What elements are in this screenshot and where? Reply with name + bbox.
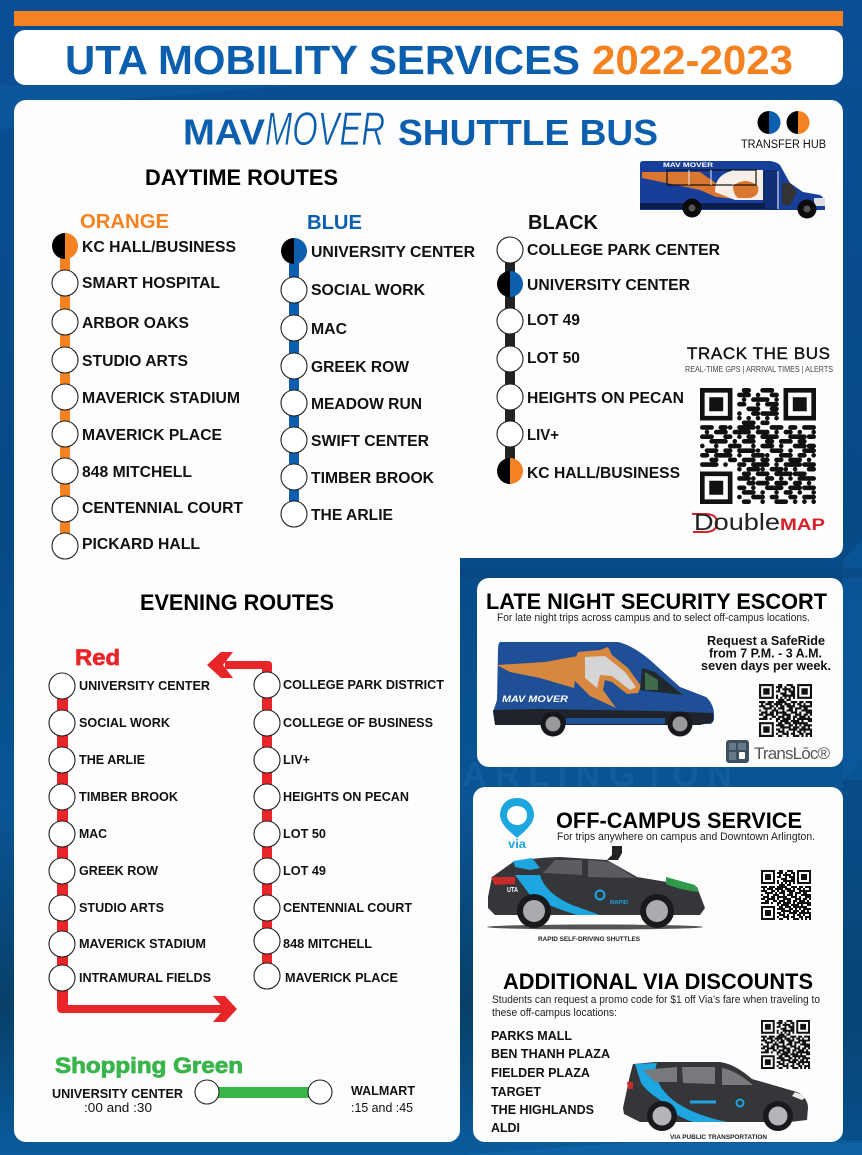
heading: additional Via discounts: ADDITIONAL VIA DISCOUNTS — [503, 969, 813, 994]
route: black: COLLEGE PARK CENTER — [527, 242, 720, 259]
route: shopping green: WALMART — [351, 1083, 415, 1098]
route: red left column — [49, 645, 237, 1022]
logo: DoubleMap: Double — [694, 509, 780, 535]
route: blue: UNIVERSITY CENTER — [311, 244, 475, 261]
heading: MavMover Shuttle Bus: MOVER — [265, 102, 385, 155]
list: discount locations: BEN THANH PLAZA — [491, 1046, 611, 1061]
route name: black: BLACK — [528, 212, 599, 234]
route: red left column: GREEK ROW — [79, 863, 159, 878]
heading: daytime routes: DAYTIME ROUTES — [145, 165, 338, 190]
route: black: KC HALL/BUSINESS — [527, 465, 680, 482]
description: late night: For late night trips across campus and to select off-campus locations. — [497, 612, 810, 624]
description: discounts: these off-campus locations: — [492, 1007, 617, 1019]
route name: blue: BLUE — [307, 212, 362, 234]
route: black: LIV+ — [527, 427, 559, 444]
heading: track the bus: TRACK THE BUS — [687, 344, 830, 363]
route: blue: SWIFT CENTER — [311, 433, 429, 450]
route: orange: STUDIO ARTS — [82, 353, 188, 370]
heading: MavMover Shuttle Bus: SHUTTLE BUS — [398, 112, 658, 153]
panel: via services — [473, 787, 843, 1142]
route: red right column: MAVERICK PLACE — [285, 970, 398, 985]
route name: red: Red — [75, 645, 120, 670]
route: black: LOT 49 — [527, 312, 580, 329]
route: red right column: HEIGHTS ON PECAN — [283, 789, 409, 804]
logo: Via — [500, 798, 534, 851]
logo: DoubleMap — [692, 509, 825, 535]
title text: UTA Mobility Services: UTA MOBILITY SERVICES — [65, 37, 580, 83]
caption: rapid self-driving shuttles: RAPID SELF-DRIVING SHUTTLES — [538, 937, 640, 943]
caption: tracking features: REAL-TIME GPS | ARRIVAL TIMES | ALERTS — [685, 365, 833, 374]
icon: Via minivan — [623, 1062, 808, 1131]
list: discount locations: FIELDER PLAZA — [491, 1065, 591, 1080]
legend: transfer hub — [741, 111, 826, 151]
heading: MavMover Shuttle Bus: MAV — [183, 112, 265, 152]
route: black: HEIGHTS ON PECAN — [527, 390, 684, 407]
route: red left column: STUDIO ARTS — [79, 900, 164, 915]
icon: self-driving car: UTA — [507, 887, 518, 894]
list: discount locations — [491, 1028, 611, 1135]
route: red right column: CENTENNIAL COURT — [283, 900, 412, 915]
icon: self-driving car: RAPID — [610, 900, 628, 906]
route: red left column: SOCIAL WORK — [79, 715, 171, 730]
route: red left column: MAVERICK STADIUM — [79, 936, 206, 951]
QR code: Via off-campus — [761, 870, 811, 920]
route: orange: KC HALL/BUSINESS — [82, 239, 236, 256]
heading: late night security escort: LATE NIGHT SECURITY ESCORT — [486, 589, 827, 614]
title banner — [14, 30, 843, 85]
route: orange — [52, 211, 243, 559]
route: orange: MAVERICK STADIUM — [82, 390, 240, 407]
heading: off-campus service: OFF-CAMPUS SERVICE — [556, 808, 802, 833]
title text: year: 2022-2023 — [592, 37, 793, 83]
caption: via public transportation: VIA PUBLIC TRANSPORTATION — [670, 1135, 767, 1141]
route: orange: MAVERICK PLACE — [82, 427, 222, 444]
description: discounts: Students can request a promo code for $1 off Via’s fare when traveling to — [492, 994, 820, 1006]
QR code: TransLoc — [759, 684, 812, 737]
QR code: Via discounts — [761, 1020, 810, 1069]
route: shopping green: UNIVERSITY CENTER — [52, 1086, 184, 1101]
icon: shuttle bus: MAV MOVER — [663, 163, 714, 169]
heading: MavMover Shuttle Bus — [183, 102, 658, 155]
route: red right column: 848 MITCHELL — [283, 936, 372, 951]
route: red right column: COLLEGE PARK DISTRICT — [283, 677, 444, 692]
arrow: to left column — [207, 652, 272, 690]
route: black: LOT 50 — [527, 350, 580, 367]
logo: DoubleMap: MAP — [780, 516, 825, 534]
heading: evening routes: EVENING ROUTES — [140, 590, 334, 615]
route: black: UNIVERSITY CENTER — [527, 277, 690, 294]
route: blue: GREEK ROW — [311, 359, 410, 376]
logo: TransLoc: TransLōc® — [754, 744, 830, 763]
callout: request a SafeRide: Request a SafeRide — [707, 633, 825, 648]
route: red left column: THE ARLIE — [79, 752, 145, 767]
list: discount locations: ALDI — [491, 1120, 520, 1135]
icon: Mav Mover van — [493, 642, 714, 736]
arrow: to right column — [57, 985, 237, 1022]
route: orange: PICKARD HALL — [82, 536, 200, 553]
callout: request a SafeRide: from 7 P.M. - 3 A.M. — [709, 646, 822, 660]
route: red right column: LOT 50 — [283, 826, 326, 841]
legend: transfer hub: TRANSFER HUB — [741, 139, 826, 151]
route: blue: MAC — [311, 321, 347, 338]
list: discount locations: TARGET — [491, 1084, 541, 1099]
description: discounts — [492, 994, 820, 1019]
QR code: DoubleMap — [700, 388, 816, 504]
track the bus — [685, 344, 833, 535]
route: red left column: UNIVERSITY CENTER — [79, 678, 211, 693]
list: discount locations: PARKS MALL — [491, 1028, 572, 1043]
route: orange: ARBOR OAKS — [82, 315, 189, 332]
route: blue: SOCIAL WORK — [311, 282, 425, 299]
route: shopping green — [52, 1053, 415, 1115]
route: orange: SMART HOSPITAL — [82, 275, 220, 292]
callout: request a SafeRide — [701, 633, 831, 673]
list: discount locations: THE HIGHLANDS — [491, 1102, 594, 1117]
route: orange: CENTENNIAL COURT — [82, 500, 243, 517]
icon: self-driving car — [487, 846, 705, 930]
route: red left column: INTRAMURAL FIELDS — [79, 970, 211, 985]
route: blue: THE ARLIE — [311, 507, 393, 524]
icon: shuttle bus — [640, 161, 825, 218]
route name: shopping green: Shopping Green — [55, 1053, 243, 1078]
route: shopping green: :15 and :45 — [351, 1100, 413, 1115]
top orange bar — [14, 11, 843, 26]
route: shopping green: :00 and :30 — [84, 1100, 152, 1115]
route: red right column — [207, 652, 444, 989]
background: ARLINGTON — [462, 756, 732, 794]
logo: TransLoc — [726, 740, 830, 763]
route: black — [497, 212, 720, 484]
icon: Mav Mover van: MAV MOVER — [502, 694, 568, 705]
callout: request a SafeRide: seven days per week. — [701, 658, 831, 673]
description: off-campus: For trips anywhere on campus and Downtown Arlington. — [557, 831, 815, 843]
route: orange: 848 MITCHELL — [82, 464, 192, 481]
route: blue — [281, 212, 475, 527]
route: red left column: MAC — [79, 826, 108, 841]
route: red right column: COLLEGE OF BUSINESS — [283, 715, 433, 730]
route name: orange: ORANGE — [80, 211, 169, 233]
route: red right column: LOT 49 — [283, 863, 326, 878]
route: blue: MEADOW RUN — [311, 396, 422, 413]
route: red left column: TIMBER BROOK — [79, 789, 179, 804]
panel: late night security escort — [477, 578, 843, 767]
route: blue: TIMBER BROOK — [311, 470, 434, 487]
route: red right column: LIV+ — [283, 752, 310, 767]
logo: Via: via — [508, 837, 526, 851]
